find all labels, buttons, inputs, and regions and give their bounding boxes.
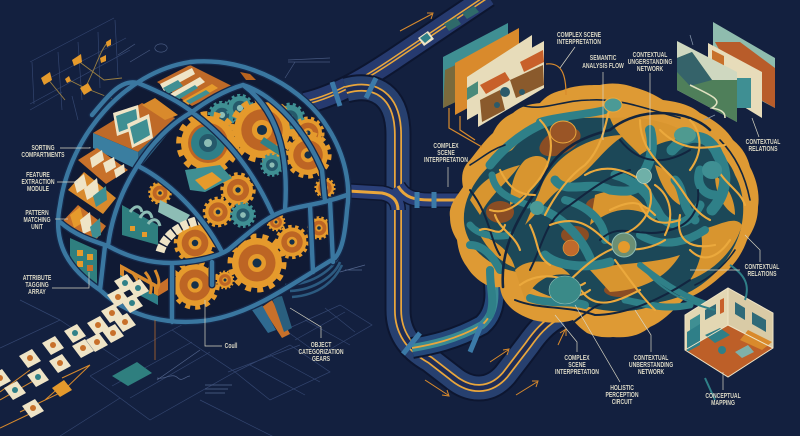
label: holistic perception circuit: PERCEPTION	[605, 392, 639, 399]
label: pattern matching unit	[24, 210, 51, 231]
orange neural veins	[480, 105, 745, 310]
label: semantic analysis flow	[582, 55, 624, 70]
curved tape	[160, 220, 200, 252]
label: contextual understanding network top: CONTEXTUAL	[633, 52, 668, 59]
label: complex scene interpretation bottom: COMPLEX	[564, 355, 590, 362]
label: complex scene interpretation top	[557, 32, 601, 46]
label: attribute tagging array: ATTRIBUTE	[23, 275, 51, 282]
brain inner shade	[464, 118, 743, 311]
top diagonal pipe	[305, 0, 488, 103]
label: contextual relations upper: RELATIONS	[748, 146, 778, 153]
label: contextual understanding network top	[628, 52, 673, 73]
chart nodes	[41, 39, 123, 103]
label: contextual relations lower	[745, 264, 780, 278]
label: contextual understanding network top: NETWORK	[637, 66, 664, 73]
label: complex scene interpretation bottom: SCENE	[568, 362, 586, 369]
label: attribute tagging array: ARRAY	[28, 289, 46, 296]
dome interior	[58, 61, 348, 322]
landscape panel	[677, 41, 737, 122]
right scene panels	[677, 22, 775, 122]
orange folds	[470, 117, 742, 300]
top compartments	[157, 65, 256, 106]
label: attribute tagging array: TAGGING	[25, 282, 49, 289]
branch pipe into the brain	[412, 265, 495, 348]
label: semantic analysis flow: ANALYSIS FLOW	[582, 63, 624, 70]
label: contextual understanding network bottom: NETWORK	[638, 369, 665, 376]
flow lines	[0, 365, 90, 428]
cards	[0, 274, 149, 418]
room cutaway	[685, 288, 773, 377]
label: contextual understanding network bottom: UNBERSTANDING	[629, 362, 673, 369]
junction nodes	[530, 98, 722, 304]
main vertical pipe	[346, 88, 560, 388]
feature shelf	[68, 148, 128, 214]
label: holistic perception circuit: CIRCUIT	[612, 399, 633, 406]
label: contextual understanding network top: UNGERSTANDING	[628, 59, 673, 66]
leader lines	[52, 47, 760, 390]
pattern shelf	[62, 205, 106, 240]
label: complex scene interpretation left: INTERPRETATION	[424, 157, 468, 164]
gears	[149, 95, 335, 307]
label: holistic perception circuit	[605, 385, 639, 406]
label: contextual relations lower: CONTEXTUAL	[745, 264, 780, 271]
label: object categorization gears: CATEGORIZATION	[298, 349, 344, 356]
room floor	[685, 325, 773, 377]
label: sorting compartments	[21, 145, 65, 159]
label: object categorization gears	[298, 342, 344, 363]
label: complex scene interpretation top: COMPLEX SCENE	[557, 32, 601, 39]
label: contextual understanding network bottom: CONTEXTUAL	[634, 355, 669, 362]
label: object categorization gears: GEARS	[312, 356, 330, 363]
frame	[58, 61, 348, 322]
market scene	[478, 41, 544, 127]
label: feature extraction module: EXTRACTION	[21, 179, 55, 186]
label: attribute tagging array	[23, 275, 51, 296]
tagging press	[122, 205, 160, 245]
label: contextual relations lower: RELATIONS	[747, 271, 777, 278]
pipe flow arrows	[400, 13, 566, 396]
left scene panels	[443, 23, 566, 147]
label: sorting compartments: COMPARTMENTS	[21, 152, 65, 159]
label: feature extraction module: FEATURE	[26, 172, 50, 179]
label: pattern matching unit: PATTERN	[25, 210, 49, 217]
machine dome	[58, 61, 348, 338]
brain	[450, 84, 759, 337]
feed mouth	[120, 264, 168, 305]
label: contextual understanding network bottom	[629, 355, 673, 376]
frame shadow	[58, 61, 348, 322]
panel connectors	[449, 64, 566, 147]
blueprint grid: top left	[30, 18, 330, 120]
pipe collars	[332, 78, 482, 354]
label: pattern matching unit: UNIT	[31, 224, 43, 231]
label: semantic analysis flow: SEMANTIC	[590, 55, 617, 62]
label: complex scene interpretation bottom	[555, 355, 599, 376]
card stream	[0, 274, 149, 428]
label: complex scene interpretation left	[424, 143, 468, 164]
label: complex scene interpretation left: SCENE	[437, 150, 455, 157]
label: complex scene interpretation bottom: INTERPRETATION	[555, 369, 599, 376]
label: feature extraction module: MODULE	[27, 186, 49, 193]
label: conceptual mapping: CONCEPTUAL	[705, 393, 741, 400]
label: contextual relations upper: CONTEXTUAL	[746, 139, 781, 146]
label: conceptual mapping	[705, 393, 741, 407]
floor module tile	[112, 362, 152, 386]
label: coull: Coull	[225, 343, 238, 350]
label: feature extraction module	[21, 172, 55, 193]
label: object categorization gears: OBJECT	[311, 342, 332, 349]
label: complex scene interpretation top: INTERPRETATION	[557, 39, 601, 46]
brown patches	[486, 122, 636, 297]
pipes	[305, 0, 560, 388]
label: pattern matching unit: MATCHING	[24, 217, 51, 224]
attribute panel	[70, 238, 97, 285]
label: holistic perception circuit: HOLISTIC	[610, 385, 634, 392]
teal connector to room	[645, 265, 747, 400]
mid horizontal pipes	[348, 186, 462, 210]
blueprint grid: lower floor	[0, 265, 372, 436]
teal gyri	[470, 110, 725, 315]
brain silhouette	[450, 84, 759, 337]
dark sulci	[470, 100, 750, 325]
sorting compartments	[93, 98, 178, 170]
label: contextual relations upper	[746, 139, 781, 153]
coil and stand	[252, 258, 342, 338]
label: sorting compartments: SORTING	[31, 145, 55, 152]
label: conceptual mapping: MAPPING	[711, 400, 735, 407]
label: complex scene interpretation left: COMPLEX	[433, 143, 459, 150]
